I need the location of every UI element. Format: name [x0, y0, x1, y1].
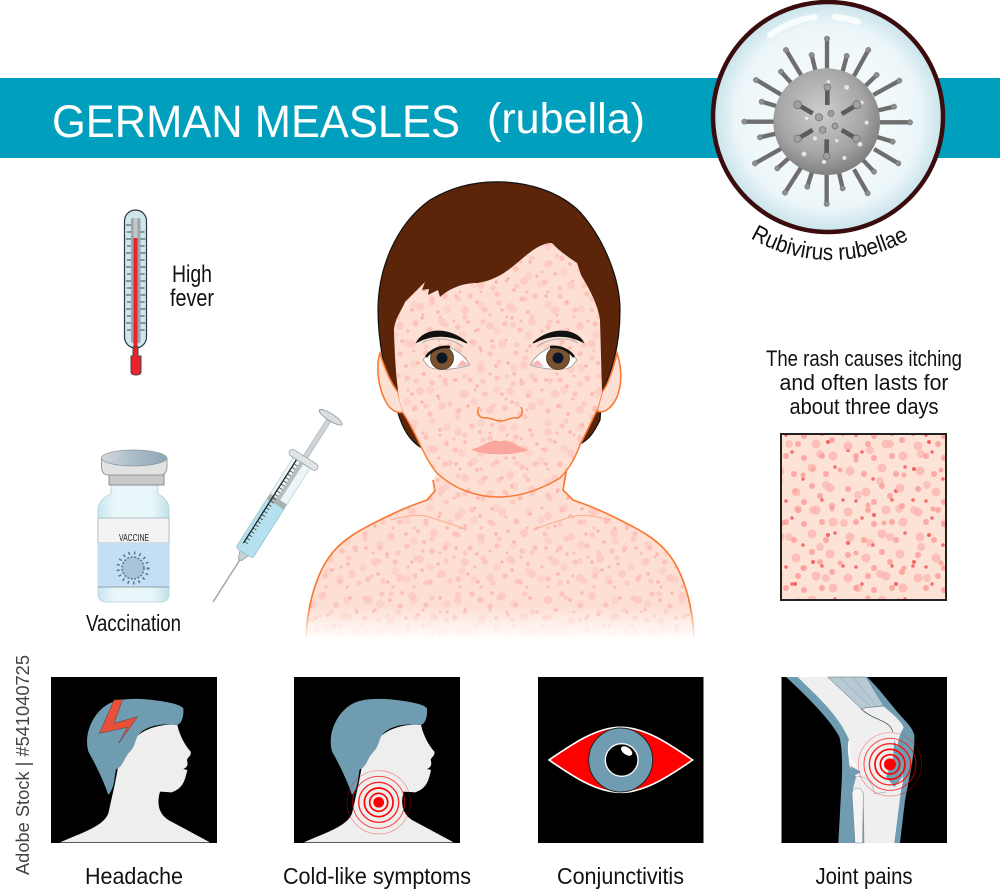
- panel: cold-like symptoms: [294, 677, 460, 843]
- panel: rash sample: [781, 434, 946, 600]
- rash description: The rash causes itching: [766, 346, 962, 371]
- label: cold-like symptoms: Cold-like symptoms: [283, 863, 471, 889]
- body with rash: [295, 467, 705, 640]
- face with rash: [394, 243, 602, 497]
- label: high fever: [170, 261, 214, 312]
- rash description: [766, 346, 962, 419]
- icon: thermometer: [124, 210, 146, 375]
- icon: syringe: [199, 405, 346, 611]
- icon: virus in lens: [713, 2, 943, 232]
- label: vaccination: Vaccination: [86, 610, 181, 636]
- label: joint pains: Joint pains: [816, 863, 912, 889]
- panel: joint pains: [782, 677, 947, 843]
- nose: [478, 407, 522, 421]
- left eye: [417, 331, 470, 370]
- label: high fever: High: [172, 261, 212, 288]
- illustration: child with rash: [295, 182, 705, 640]
- label: headache: Headache: [85, 863, 183, 889]
- header band: [0, 78, 1000, 158]
- left ear: [378, 353, 403, 412]
- virus label: Rubivirus rubellae: [752, 224, 907, 260]
- icon: vaccine vial: VACCINE: [119, 532, 149, 544]
- right ear: [597, 353, 621, 412]
- rash description: and often lasts for: [780, 370, 948, 395]
- label: high fever: fever: [170, 285, 214, 312]
- rash description: about three days: [790, 394, 938, 419]
- lips: [472, 441, 527, 454]
- panel: conjunctivitis: [538, 677, 704, 843]
- subtitle: (rubella): [487, 95, 645, 143]
- panel: headache: [51, 677, 217, 843]
- hair: [378, 182, 620, 447]
- icon: vaccine vial: [98, 450, 169, 602]
- label: conjunctivitis: Conjunctivitis: [557, 863, 684, 889]
- right eye: [530, 331, 583, 370]
- title: GERMAN MEASLES: [52, 96, 460, 147]
- stock image id: Adobe Stock | #541040725: [13, 655, 33, 875]
